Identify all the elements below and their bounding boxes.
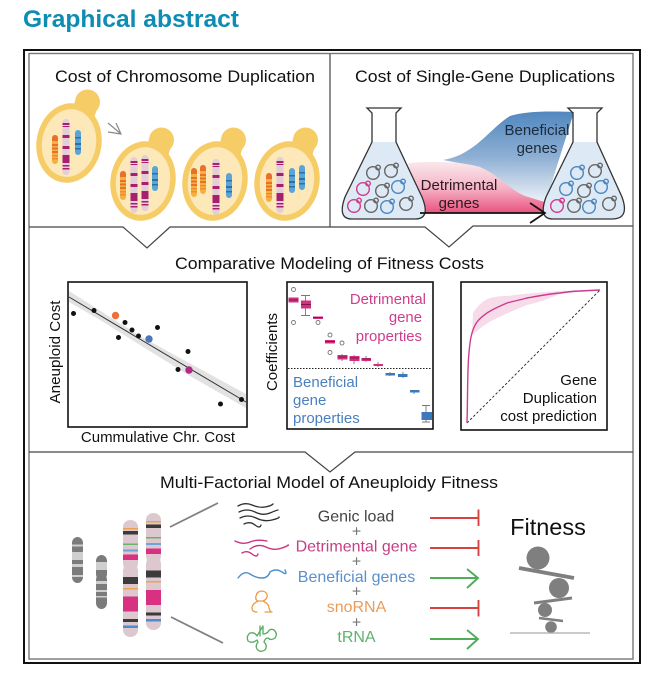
label: beneficial gene properties: properties <box>293 410 360 427</box>
plus signs: + <box>352 614 361 632</box>
icon: small grey chromosome 2 <box>96 555 107 609</box>
icon: left flask <box>342 108 425 219</box>
arrow: chromosome gain <box>108 123 121 134</box>
label: detrimental gene properties: properties <box>356 329 422 345</box>
text: snoRNA: snoRNA <box>327 599 387 616</box>
icon: large banded chromosome 2 <box>146 513 161 630</box>
plus signs <box>352 524 361 632</box>
icon: tRNA <box>247 626 276 651</box>
label: beneficial genes: Beneficial <box>504 122 570 139</box>
label: gene duplication cost prediction: Duplication <box>523 390 597 407</box>
model terms <box>296 508 418 646</box>
zoom lines <box>170 503 223 643</box>
panel: multi-factorial model <box>72 503 590 651</box>
icon: snoRNA <box>252 591 272 612</box>
icon: yeast cell parent <box>30 90 108 188</box>
heading: multi-factorial model: Multi-Factorial Model of Aneuploidy Fitness <box>160 473 498 492</box>
heading: comparative modeling: Comparative Modeling of Fitness Costs <box>175 254 484 273</box>
section dividers with notches <box>29 54 633 472</box>
label: beneficial gene properties: Beneficial <box>293 374 358 391</box>
text: detrimental gene: Detrimental gene <box>296 538 418 556</box>
panel: cost of chromosome duplication <box>30 67 326 226</box>
icon: detrimental gene <box>235 540 288 556</box>
chart: scatter plot <box>47 282 247 446</box>
area: beneficial genes <box>443 111 574 204</box>
icon: balancing stack <box>510 546 590 633</box>
label: beneficial gene properties: gene <box>293 392 326 409</box>
icon: right flask <box>543 108 624 219</box>
label: detrimental gene properties: Detrimental <box>350 292 426 308</box>
title: Graphical abstract <box>23 6 239 33</box>
icon: large banded chromosome 1 <box>123 520 138 637</box>
panel: cost of single-gene duplications <box>342 67 624 223</box>
label: gene duplication cost prediction: Gene <box>560 372 597 389</box>
label: detrimental genes: genes <box>439 195 479 212</box>
icon: beneficial gene <box>238 570 286 578</box>
text: beneficial genes: Beneficial genes <box>298 569 415 586</box>
icon: genic load <box>238 504 279 527</box>
heading: single-gene duplications: Cost of Single-Gene Duplications <box>355 67 615 86</box>
heading: chromosome duplication: Cost of Chromosome Duplication <box>55 67 315 86</box>
label: gene duplication cost prediction: cost prediction <box>500 408 597 425</box>
axis label: cumulative chr cost: Cummulative Chr. Cost <box>81 429 236 446</box>
activation arrows <box>430 569 478 649</box>
label: detrimental gene properties: gene <box>389 310 422 326</box>
area: detrimental genes <box>408 162 548 213</box>
arrow: flask to flask <box>420 203 545 223</box>
axis label: coefficients: Coefficients <box>264 313 281 391</box>
inhibition marks <box>430 510 478 616</box>
chart: coefficient box plot <box>264 282 433 429</box>
axis label: aneuploid cost: Aneuploid Cost <box>47 300 64 404</box>
plus signs: + <box>352 584 361 600</box>
plus signs: + <box>352 524 361 540</box>
icon: small grey chromosome 1 <box>72 537 83 583</box>
label: beneficial genes: genes <box>517 140 557 157</box>
chart: ROC prediction curve <box>461 282 607 430</box>
heading: fitness: Fitness <box>510 514 586 540</box>
text: genic load: Genic load <box>318 508 394 526</box>
text: tRNA: tRNA <box>337 629 376 646</box>
icon: yeast cell with orange chromosome gain <box>176 128 254 226</box>
icon: yeast cell with blue chromosome gain <box>248 128 326 226</box>
label: detrimental genes: Detrimental <box>421 177 497 194</box>
plus signs: + <box>352 554 361 570</box>
icon: yeast cell with large chromosome gain <box>104 128 182 226</box>
